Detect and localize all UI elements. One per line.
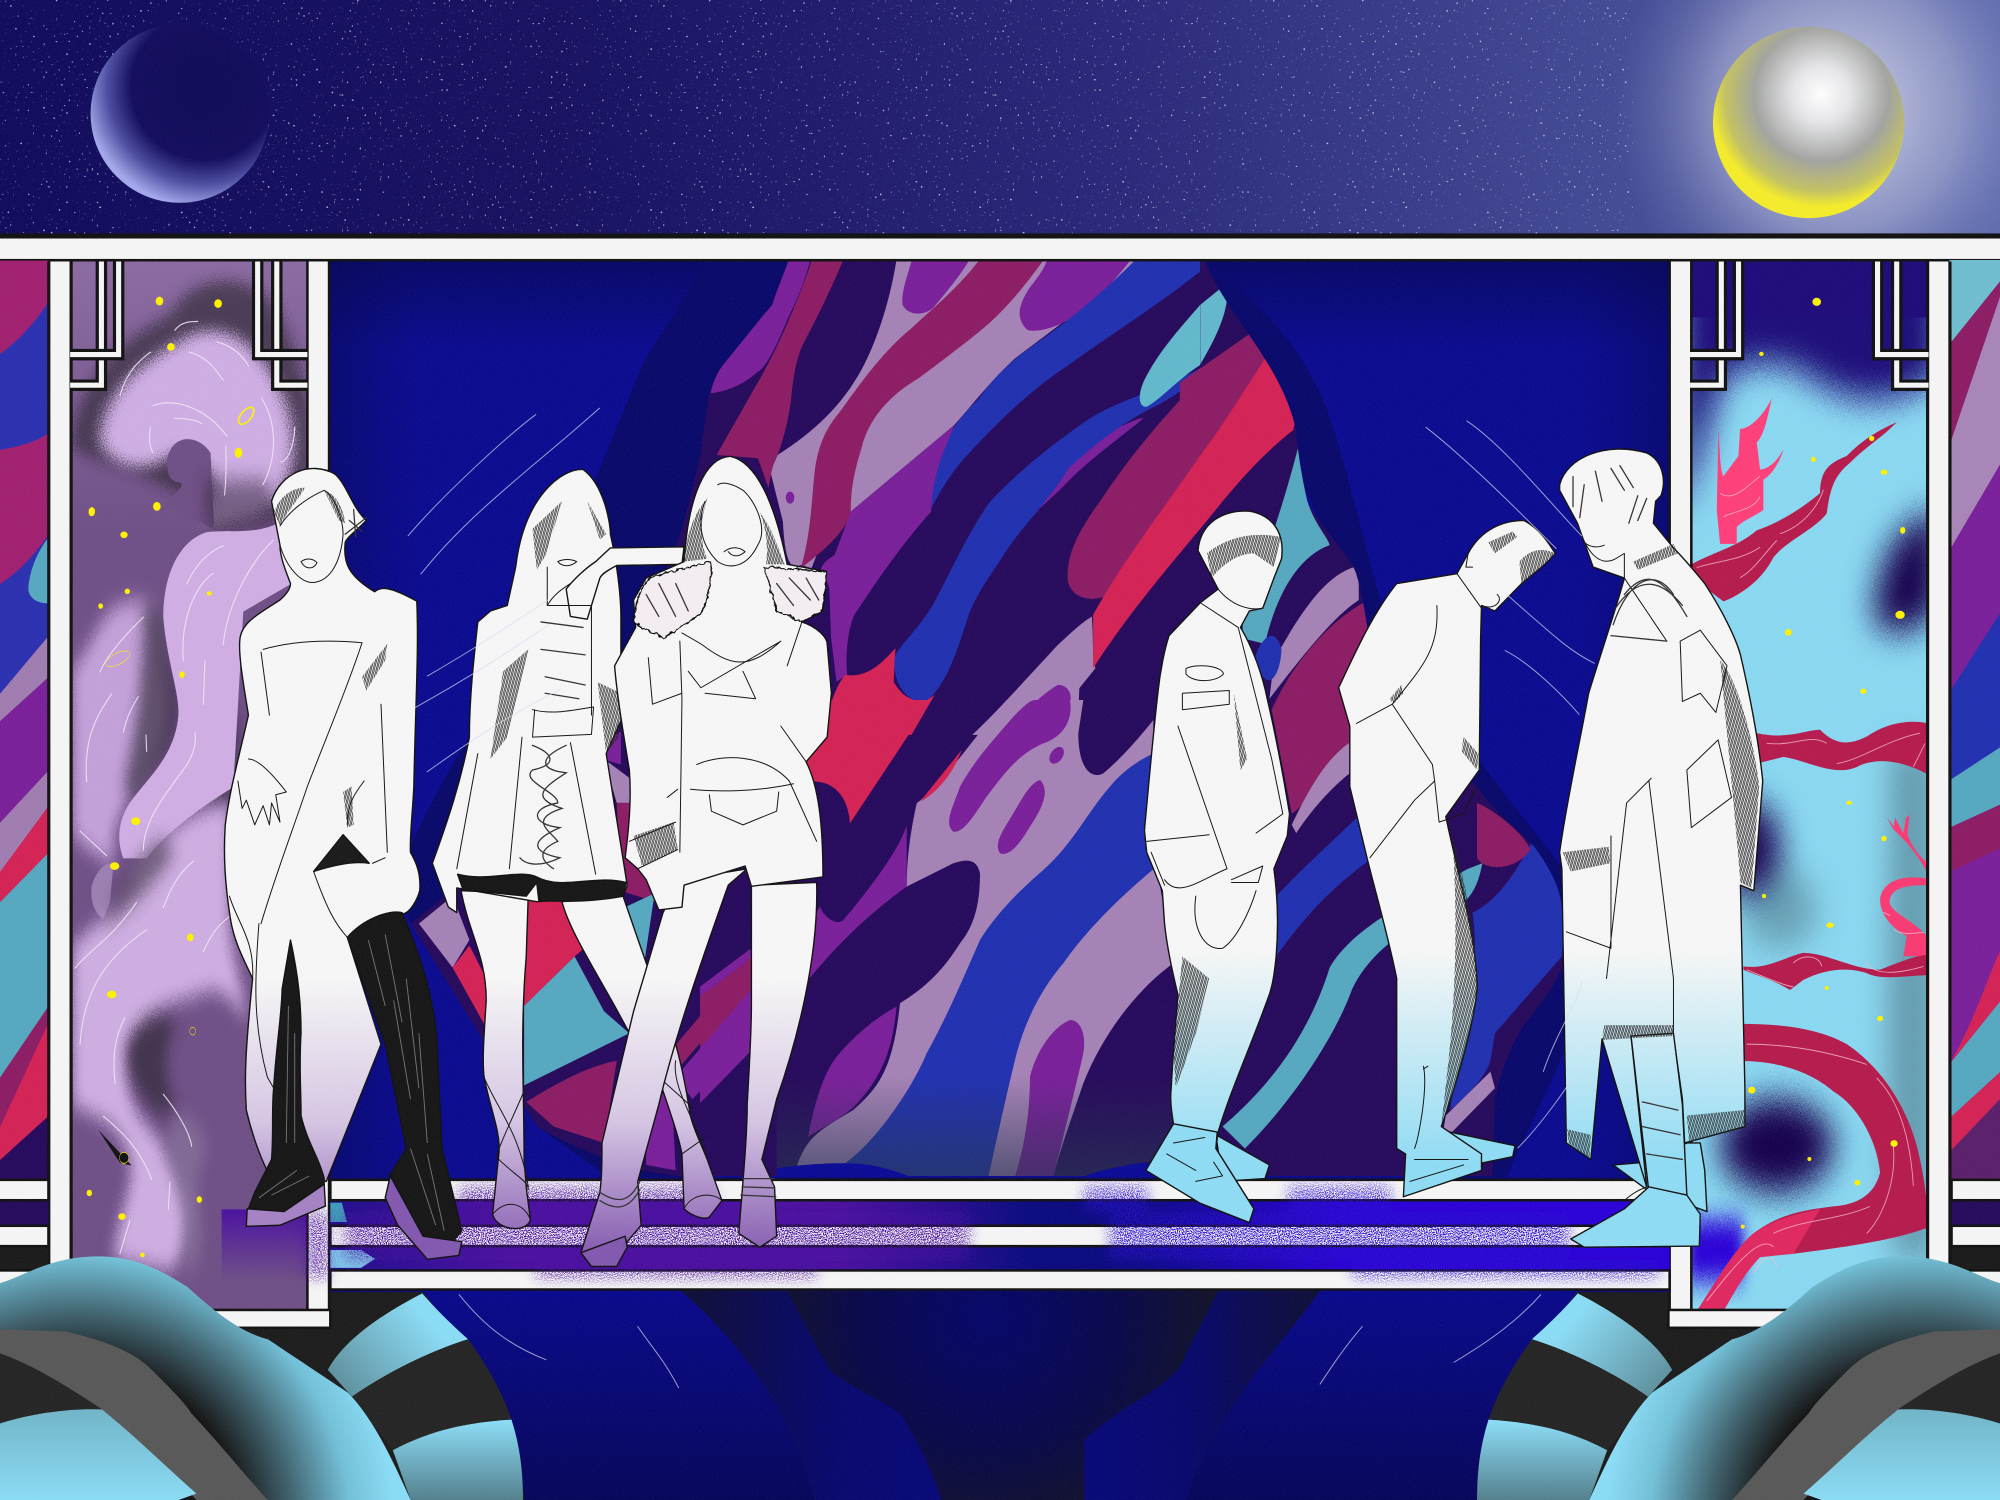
- back shoe: [1613, 1143, 1707, 1212]
- shape: violet rectangle: [600, 732, 621, 765]
- far leg: [739, 882, 817, 1247]
- shape: maroon: [1272, 603, 1370, 814]
- smoke top: [99, 331, 294, 526]
- dark halo: low: [1720, 1098, 1833, 1193]
- mound: dark under band: [1898, 1353, 2000, 1423]
- right boot: [347, 912, 462, 1247]
- line details: [1147, 589, 1283, 1181]
- shape: violet blob one: [902, 262, 968, 314]
- figure: man in bomber jacket: [1144, 511, 1290, 1223]
- shape: maroon left: [717, 255, 845, 488]
- shape: mauve tick: [1441, 1072, 1495, 1143]
- shoe sole: [581, 1236, 627, 1266]
- corset lacing: [520, 745, 566, 869]
- mound: back dark band: [352, 1339, 511, 1450]
- tree: pink sprig: [1717, 399, 1783, 544]
- shape: teal stripe: [1223, 863, 1482, 1148]
- shape: violet low blob: [1015, 1020, 1084, 1177]
- mound: big front: [0, 1256, 411, 1500]
- floor white stripes: [0, 1180, 2000, 1290]
- floor bands with fading glow: [330, 1202, 1670, 1269]
- line details: [457, 560, 596, 874]
- frame and pillars: [47, 261, 1952, 1329]
- yellow sparks: [1741, 298, 1905, 1229]
- teal grey haze left: [1743, 868, 1817, 949]
- central stage backdrop: [328, 261, 1671, 1182]
- top smoke lines: [120, 321, 295, 495]
- mound: back cyan: [328, 1293, 468, 1397]
- shape: royal right: [1450, 836, 1566, 1110]
- shape: violet lobe: [998, 780, 1045, 854]
- figure: woman with long hair and lace skirt: [432, 469, 722, 1229]
- left side panel: [70, 261, 310, 1314]
- shape: maroon lower: [526, 1061, 617, 1143]
- mound: dark under band: [0, 1353, 102, 1423]
- icon: yellow full moon: [1713, 27, 1904, 218]
- floor glow in panel: [222, 1209, 308, 1281]
- body: [1144, 511, 1290, 1223]
- shape: teal: [1243, 446, 1330, 644]
- mound: back cyan: [1532, 1293, 1672, 1397]
- shape: violet dot: [1046, 744, 1067, 766]
- back shoe: [1216, 1135, 1269, 1181]
- figure: woman with fur collar and shorts: [581, 456, 831, 1266]
- floor glow: [1687, 1220, 1743, 1281]
- right boot sole: [385, 1176, 462, 1259]
- right side panel: [1680, 219, 1940, 1314]
- front shoe: [1571, 1187, 1700, 1247]
- line details: [1566, 523, 1732, 1201]
- mound: big front: [1589, 1256, 2000, 1500]
- swirl tongue: [163, 439, 214, 529]
- near leg: [461, 891, 530, 1229]
- body and dress: [224, 468, 420, 1181]
- mound: back dark band: [1489, 1339, 1648, 1450]
- shape: teal main: [524, 893, 655, 1085]
- curtain fold: right: [1205, 261, 1580, 1180]
- sandal wraps: [484, 1061, 722, 1220]
- shape: mauve second: [1292, 743, 1354, 833]
- strip: teal top: [1949, 260, 2000, 344]
- shoulder stripes: [1611, 579, 1687, 641]
- strip: teal mid: [1949, 747, 2000, 1118]
- shape: maroon right: [1068, 378, 1200, 599]
- shape: far left maroon: [700, 957, 757, 1047]
- shape: crimson wedge: [453, 946, 486, 1028]
- smoke: dark stipple lower: [126, 1017, 177, 1115]
- mound: grey band: [0, 1329, 268, 1500]
- right inner pillar: [1668, 261, 1693, 1329]
- smoke: small blob: [91, 863, 113, 919]
- top yellow sparks: [89, 297, 242, 516]
- smoke: dark under ribbon: [103, 839, 177, 927]
- shape: violet left band: [800, 825, 907, 990]
- tree: sprig low: [1880, 811, 1927, 956]
- shape: violet left: [711, 255, 811, 393]
- boot highlights: [259, 935, 444, 1231]
- right outer pillar: [1926, 261, 1952, 1282]
- hatching: hair and cuff: [634, 499, 785, 866]
- strip: violet: [0, 677, 48, 823]
- mural: upper colour shapes: [711, 255, 1200, 735]
- floor cyan reflections: [330, 1250, 375, 1268]
- shape: violet left low: [808, 1007, 897, 1137]
- shape: mauve field: [770, 255, 1147, 568]
- hatching: hair and fabric: [274, 488, 387, 828]
- curtain highlights: [459, 1295, 1541, 1388]
- skirt hem: [458, 874, 626, 901]
- left boot sole: [246, 1184, 325, 1226]
- shape: crimson lower: [819, 648, 935, 735]
- mural: lower colour shapes: [700, 700, 1190, 1180]
- mural: dark base: [383, 261, 1594, 1180]
- strip: crimson: [0, 806, 48, 1160]
- mound: back lower cyan: [1477, 1420, 1607, 1500]
- dark halo: upper right: [1873, 510, 1940, 633]
- torso, hair and skirt: [432, 469, 627, 913]
- strip: blue: [1949, 611, 2000, 780]
- line details: [1357, 553, 1499, 1181]
- star field: [0, 0, 1633, 236]
- hatching: hair and trouser shadow: [1390, 531, 1555, 1127]
- strip: blue band: [0, 302, 48, 694]
- shape: maroon upper: [617, 803, 663, 902]
- line details: [229, 490, 387, 1088]
- mound: lower cyan: [1804, 1409, 2000, 1500]
- back shoe: [1432, 1129, 1515, 1165]
- figure: man bending with hands in pockets: [1339, 520, 1555, 1197]
- tree: bark lines: [1697, 476, 1925, 1301]
- strip: dark base: [0, 1116, 48, 1188]
- corner brackets: [70, 261, 1929, 385]
- fur collar left: [634, 562, 711, 638]
- shape: blue sweep: [845, 753, 1157, 1177]
- lower curtain: [422, 1291, 1578, 1500]
- mound: back lower cyan: [393, 1420, 523, 1500]
- mural: crimson band: [1093, 334, 1296, 668]
- left inner pillar: [306, 261, 330, 1329]
- shape: blue long stripe: [928, 255, 1200, 512]
- shape: mauve lower: [972, 617, 1095, 735]
- strip: teal flick: [28, 538, 48, 603]
- yellow rings: [105, 648, 196, 1163]
- strip: teal: [0, 853, 48, 1078]
- curtain: second right lobe: [1084, 1291, 1320, 1500]
- smoke: lower ribbon: [73, 804, 248, 1270]
- side floor fills: [0, 1180, 2000, 1282]
- figure: man in long coat: [1560, 449, 1763, 1247]
- smoke: blob left: [73, 600, 168, 864]
- white top beam: [0, 233, 2000, 263]
- shape: violet mid: [821, 425, 954, 682]
- stage vignette: [328, 261, 1671, 1182]
- shape: blue second stripe: [894, 368, 1200, 702]
- sock leg: [1631, 1033, 1687, 1195]
- body: [1339, 520, 1555, 1197]
- shape: floor fade: [777, 1077, 1190, 1180]
- smoke: grey stipple lower: [163, 1111, 207, 1281]
- torso, jacket and hair: [615, 456, 831, 910]
- mural: extension maroon: [1180, 329, 1282, 472]
- fur shading: [646, 578, 819, 616]
- shape: violet sliver: [1036, 418, 1144, 512]
- top ring: [236, 405, 257, 427]
- shape: small dot: [786, 492, 794, 504]
- hatching: long hair: [490, 501, 621, 759]
- mound: lower cyan: [0, 1409, 196, 1500]
- smoke: ribbon top: [119, 524, 300, 858]
- left edge strip: [0, 261, 48, 1188]
- hair flower: [345, 510, 366, 537]
- shape: blue lobe: [1276, 803, 1377, 957]
- night sky band: [0, 0, 2000, 236]
- yellow sparks: [87, 503, 212, 1257]
- lower smoke shapes: [73, 480, 308, 1281]
- moon glow: [1638, 0, 2000, 234]
- shape: violet lower: [1003, 685, 1071, 735]
- shape: mauve wedge: [419, 759, 634, 967]
- far leg: [562, 896, 722, 1218]
- right edge strip: [1949, 260, 2000, 1179]
- tree: branch low: [1743, 953, 1927, 990]
- teal grey haze: [1888, 747, 1937, 1260]
- floor teal reflection: [330, 1203, 347, 1222]
- curtain fold: left: [395, 261, 791, 1180]
- shape: crimson main: [524, 885, 587, 1006]
- tree: branch upper: [1692, 422, 1897, 601]
- tree: trunk lower brightness: [1697, 1209, 1820, 1311]
- black sliver: [98, 1130, 132, 1166]
- right panel sill: [1668, 1310, 1929, 1328]
- hair strands: [1573, 466, 1647, 523]
- left panel sill: [70, 1310, 330, 1328]
- left outer pillar: [47, 261, 73, 1282]
- shape: maroon long: [801, 255, 1047, 568]
- shape: violet blob long: [949, 700, 1071, 832]
- curtain: left lobe: [422, 1291, 815, 1500]
- mural: left behind-leg shapes: [419, 732, 756, 1170]
- left boot: [248, 940, 324, 1214]
- tree: trunk: [1697, 1024, 1927, 1311]
- fur collar right: [764, 567, 826, 622]
- strip: mauve: [1949, 294, 2000, 551]
- mound: grey band: [1732, 1329, 2000, 1500]
- stippled purple on stripes: [306, 1186, 969, 1278]
- dark sky top: [1680, 219, 1940, 517]
- strappy shoes: [600, 1179, 776, 1207]
- curtain: right lobe: [1186, 1291, 1578, 1500]
- near leg and shoe: [581, 869, 747, 1266]
- shape: crimson sliver: [920, 750, 962, 802]
- strip: dark violet base: [1949, 1098, 2000, 1179]
- mural: teal extension: [1200, 283, 1228, 365]
- sock folds: [1642, 1102, 1682, 1159]
- stippled blue on stripes: [1084, 1186, 1658, 1278]
- curtain: second left lobe: [681, 1291, 941, 1500]
- dark sky solid: [1680, 253, 1940, 317]
- body and coat: [1560, 449, 1763, 1187]
- shape: right stripes: [671, 951, 756, 1072]
- shape: curtain edge wave: [777, 1162, 1160, 1178]
- line details: [629, 483, 817, 910]
- shape: far left violet and maroon: [700, 947, 758, 1103]
- mound group: left: [0, 1256, 523, 1500]
- black panel: [314, 835, 369, 871]
- side dark bands: [0, 1246, 2000, 1270]
- hatching: hair and trousers: [1173, 535, 1281, 1088]
- shape: right violet: [646, 984, 756, 1170]
- curtain: centre dark: [681, 1291, 1320, 1500]
- bodice folds: [541, 622, 585, 699]
- arm over shoulder: [566, 547, 684, 619]
- shape: maroon lobe: [1477, 803, 1531, 867]
- icon: crescent moon: [91, 24, 269, 203]
- mound group: right: [1477, 1256, 2000, 1500]
- strip: mauve: [0, 636, 48, 872]
- shape: blue blob: [1254, 636, 1282, 680]
- smoke: stipple by waist: [203, 716, 240, 804]
- smoke shadow top: [71, 281, 310, 528]
- tree: branch mid: [1757, 722, 1927, 774]
- curtain line work: [408, 408, 1594, 1148]
- abstract colour mural: [383, 255, 1594, 1180]
- shape: crimson: [805, 700, 932, 823]
- smoke: dark beside blob: [123, 602, 179, 804]
- mural: right colour shapes: [1223, 446, 1566, 1148]
- shape: mauve stripe: [1269, 566, 1359, 699]
- hatching: coat sleeve, hems, collar: [1563, 544, 1759, 1158]
- smoke: cloud underside: [203, 480, 277, 532]
- shape: violet blob two: [1020, 262, 1130, 331]
- shape: mauve field: [797, 700, 1173, 1177]
- stage floor: [0, 1177, 2000, 1292]
- dark halo: mid: [1720, 801, 1780, 895]
- smoke line work: [75, 540, 273, 1253]
- strip: maroon: [1949, 280, 2000, 872]
- strip: maroon: [0, 1007, 48, 1127]
- front shoe: [1146, 1124, 1254, 1223]
- strip: crimson: [1949, 949, 2000, 1152]
- figure: woman with thigh-high boots: [224, 468, 462, 1259]
- shape: teal flick: [1140, 305, 1200, 407]
